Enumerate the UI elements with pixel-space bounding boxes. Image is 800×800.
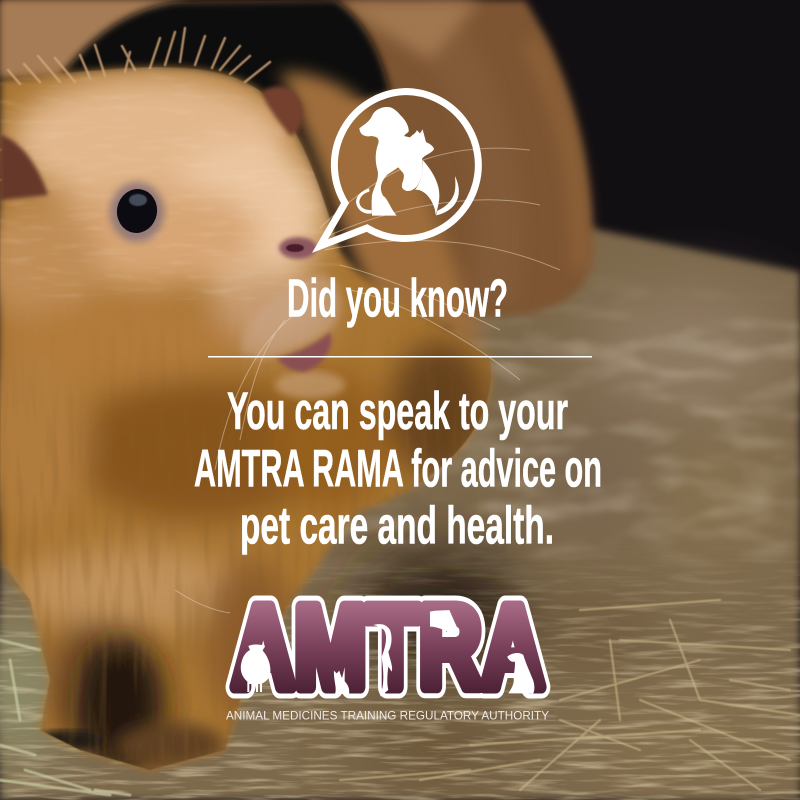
eye [110, 182, 164, 242]
logo animal silhouettes [241, 610, 534, 697]
body [0, 67, 491, 770]
divider line [208, 356, 592, 358]
nose and mouth [279, 237, 317, 259]
straw floor [0, 228, 800, 800]
body text: You can speak to your [227, 382, 568, 441]
body text: pet care and health. [240, 496, 554, 556]
cat body [415, 160, 439, 215]
logo strapline: ANIMAL MEDICINES TRAINING REGULATORY AUTHORITY [226, 708, 549, 722]
dog [507, 653, 534, 693]
whiskers [175, 148, 560, 613]
head fur texture [0, 60, 345, 300]
dog collar detail [396, 112, 409, 135]
sharp straw [0, 540, 800, 800]
back behind head [280, 72, 485, 345]
ear left [0, 135, 48, 200]
heading: Did you know?: Did you know? [287, 268, 508, 328]
dog tail [356, 188, 372, 214]
cat tail [436, 176, 459, 215]
dog silhouette [359, 107, 434, 216]
ear right [262, 86, 303, 136]
fur colour regions [0, 75, 500, 775]
logo wordmark: AMTRA [232, 582, 544, 712]
house opening [62, 0, 390, 120]
logo wordmark: AMTRA [232, 582, 544, 712]
top-of-head tufts [0, 28, 270, 180]
sheep [241, 644, 270, 692]
horse head [430, 610, 459, 636]
cat [334, 671, 349, 694]
body text [194, 382, 602, 556]
AMTRA logo [226, 582, 549, 722]
guinea pig [0, 28, 560, 775]
soft out-of-focus straw [318, 308, 800, 576]
icon: speech bubble with dog and cat [320, 92, 478, 246]
horse leg detail [373, 624, 392, 697]
wooden house [0, 0, 592, 320]
